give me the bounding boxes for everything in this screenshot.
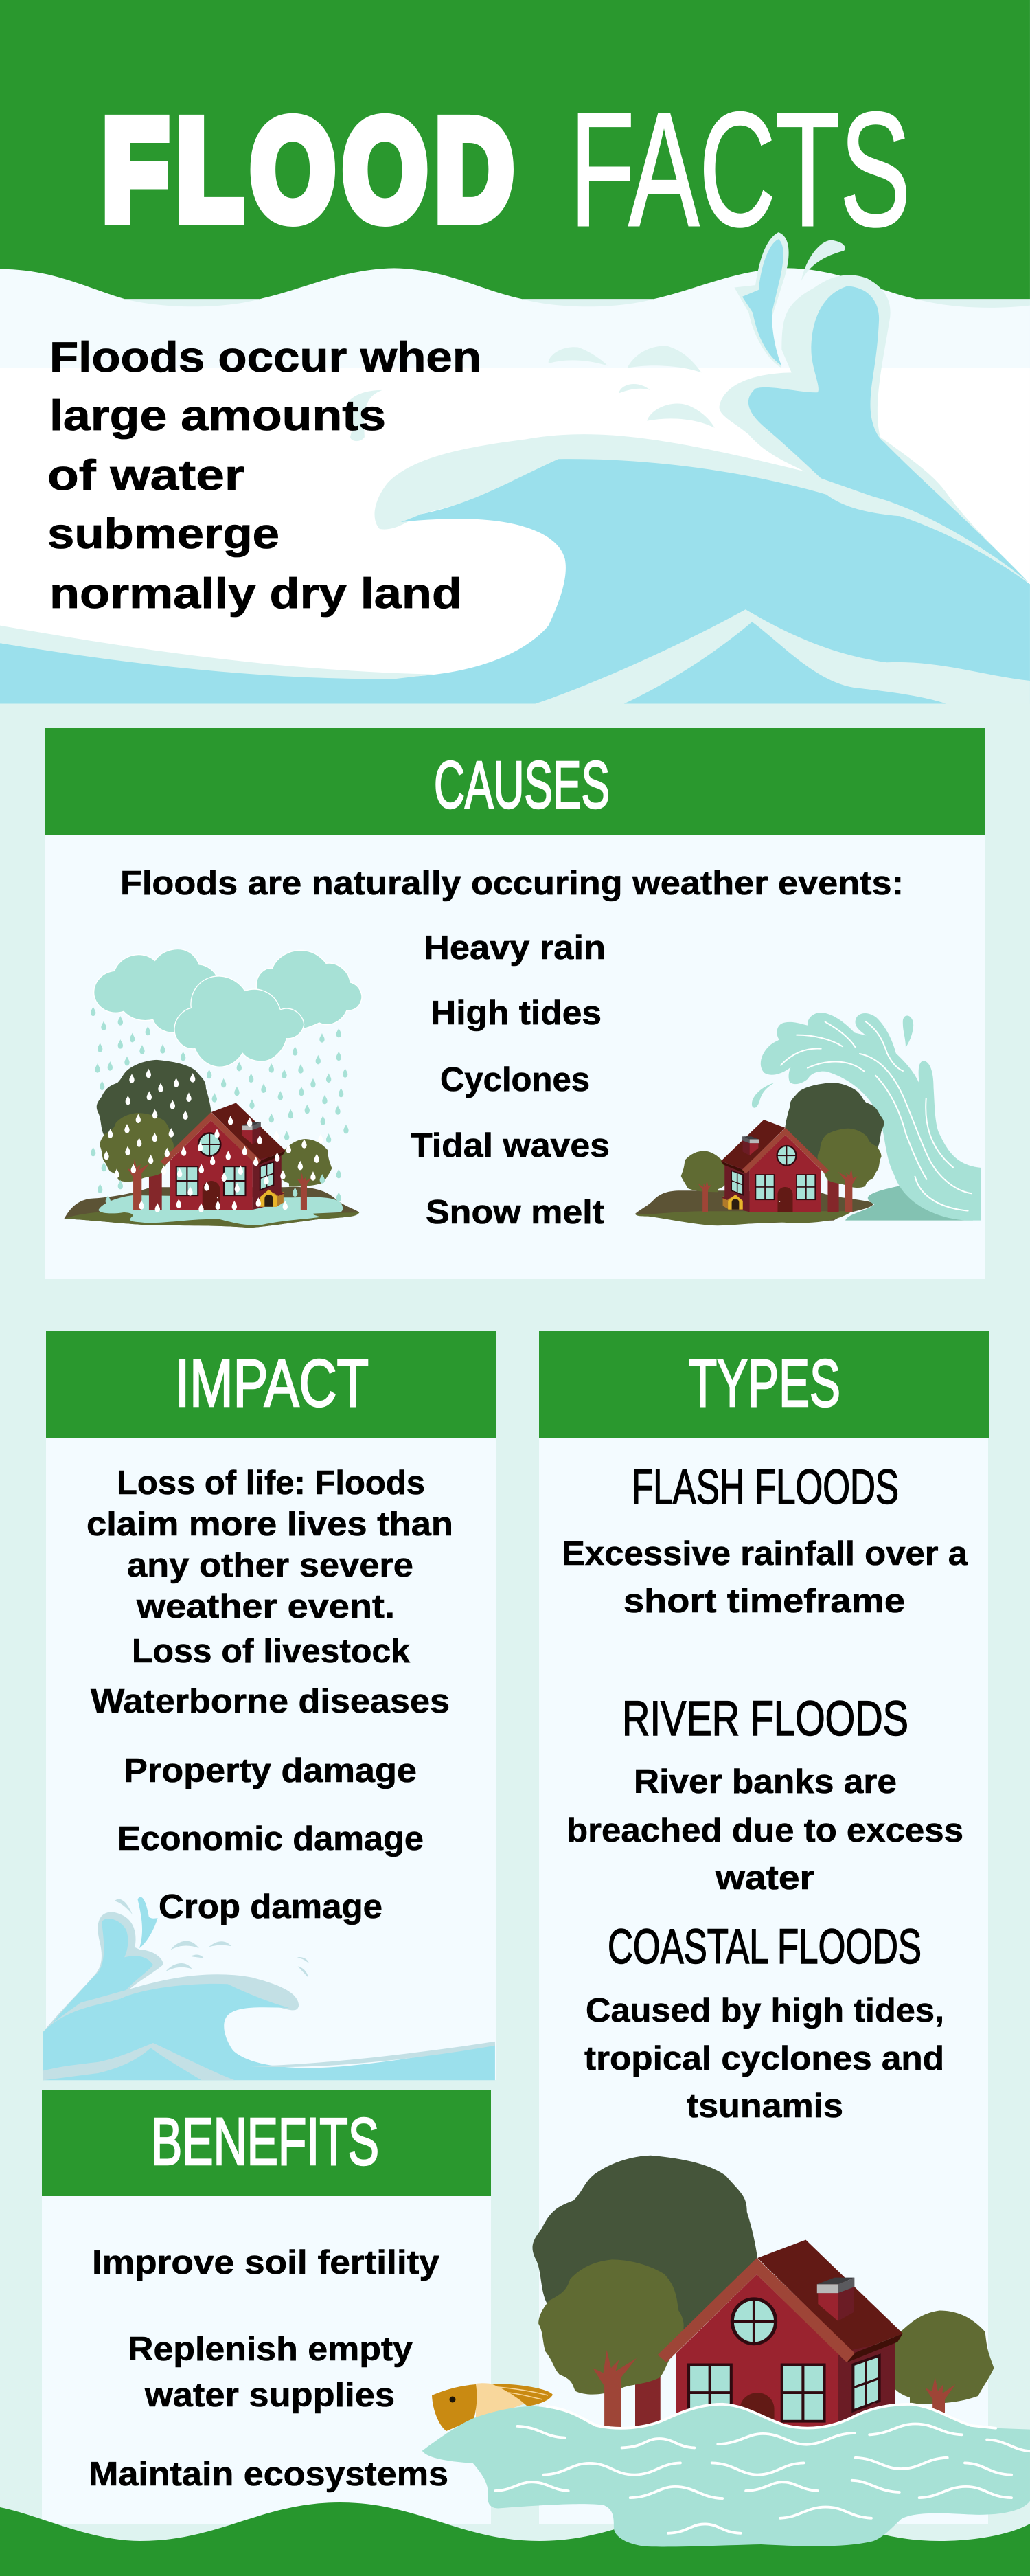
intro text: of water bbox=[47, 452, 244, 499]
coastal floods bbox=[584, 1920, 944, 2125]
impact list bbox=[87, 1465, 453, 1925]
benefits header bbox=[42, 2090, 491, 2196]
benefits list bbox=[89, 2244, 448, 2493]
impact list: Crop damage bbox=[159, 1888, 382, 1925]
causes heading: CAUSES bbox=[434, 747, 610, 822]
panel: impact bbox=[43, 1331, 496, 2080]
causes list bbox=[411, 929, 610, 1231]
intro text: large amounts bbox=[49, 392, 386, 440]
causes list: Heavy rain bbox=[424, 929, 606, 967]
impact heading: IMPACT bbox=[175, 1346, 369, 1421]
wave main body bbox=[0, 459, 1030, 703]
benefits list: Maintain ecosystems bbox=[89, 2456, 448, 2493]
impact list: Property damage bbox=[124, 1752, 417, 1789]
wave tower bbox=[748, 286, 1028, 582]
benefits list: Improve soil fertility bbox=[92, 2244, 439, 2281]
title: FLOOD bbox=[102, 91, 521, 250]
river floods: water bbox=[715, 1860, 814, 1897]
wave splash jet bbox=[734, 232, 789, 368]
title bbox=[102, 79, 911, 260]
wave crest background shape bbox=[375, 275, 1028, 582]
causes intro: Floods are naturally occuring weather events: bbox=[120, 865, 904, 902]
panel: types bbox=[539, 1331, 989, 2524]
impact list: Loss of life: Floods bbox=[117, 1465, 425, 1502]
causes list: High tides bbox=[431, 995, 602, 1032]
splash blue bbox=[742, 239, 783, 365]
flood water bbox=[422, 2404, 1030, 2547]
small wave illustration bbox=[43, 1897, 495, 2080]
river floods: RIVER FLOODS bbox=[622, 1692, 908, 1746]
causes list: Snow melt bbox=[426, 1194, 604, 1231]
flash floods: short timeframe bbox=[623, 1583, 905, 1620]
impact list: Waterborne diseases bbox=[91, 1683, 450, 1720]
river floods: breached due to excess bbox=[566, 1812, 963, 1849]
water drops bbox=[346, 240, 845, 441]
impact list: Loss of livestock bbox=[132, 1633, 411, 1670]
band shadows bbox=[125, 299, 1030, 308]
types heading: TYPES bbox=[689, 1346, 840, 1421]
coastal floods: Caused by high tides, bbox=[586, 1992, 944, 2029]
types header bbox=[539, 1331, 989, 1438]
panel: benefits bbox=[42, 2090, 491, 2524]
lower wave highlight bbox=[536, 609, 1030, 703]
causes header bbox=[45, 728, 985, 835]
impact list: Economic damage bbox=[117, 1820, 424, 1857]
green header band bbox=[0, 0, 1030, 299]
footer wave bbox=[0, 2502, 1030, 2576]
river floods bbox=[566, 1692, 963, 1897]
benefits list: water supplies bbox=[144, 2377, 395, 2414]
flash floods: Excessive rainfall over a bbox=[562, 1535, 968, 1572]
benefits list: Replenish empty bbox=[128, 2331, 413, 2368]
impact header bbox=[46, 1331, 496, 1438]
impact list: weather event. bbox=[136, 1588, 395, 1625]
intro text: Floods occur when bbox=[49, 334, 481, 381]
impact list: any other severe bbox=[127, 1547, 413, 1584]
impact list: claim more lives than bbox=[87, 1506, 453, 1543]
flash floods bbox=[562, 1460, 968, 1620]
panel: causes bbox=[45, 728, 985, 1279]
hero banner with wave bbox=[0, 0, 1030, 703]
left wave highlight bbox=[0, 626, 433, 679]
coastal floods: tropical cyclones and bbox=[584, 2040, 944, 2077]
river floods: River banks are bbox=[634, 1763, 897, 1800]
intro text: normally dry land bbox=[49, 570, 462, 618]
benefits heading: BENEFITS bbox=[151, 2104, 379, 2179]
intro text: submerge bbox=[47, 510, 279, 558]
causes list: Cyclones bbox=[440, 1061, 590, 1098]
illustration: rain over house bbox=[64, 949, 362, 1228]
coastal floods: tsunamis bbox=[687, 2088, 843, 2125]
intro text bbox=[47, 334, 481, 618]
flash floods: FLASH FLOODS bbox=[632, 1460, 899, 1515]
illustration: tidal wave over house bbox=[635, 1013, 981, 1225]
causes list: Tidal waves bbox=[411, 1127, 610, 1164]
illustration: flooded house bbox=[422, 2156, 1030, 2547]
icon: fish bbox=[432, 2383, 553, 2431]
